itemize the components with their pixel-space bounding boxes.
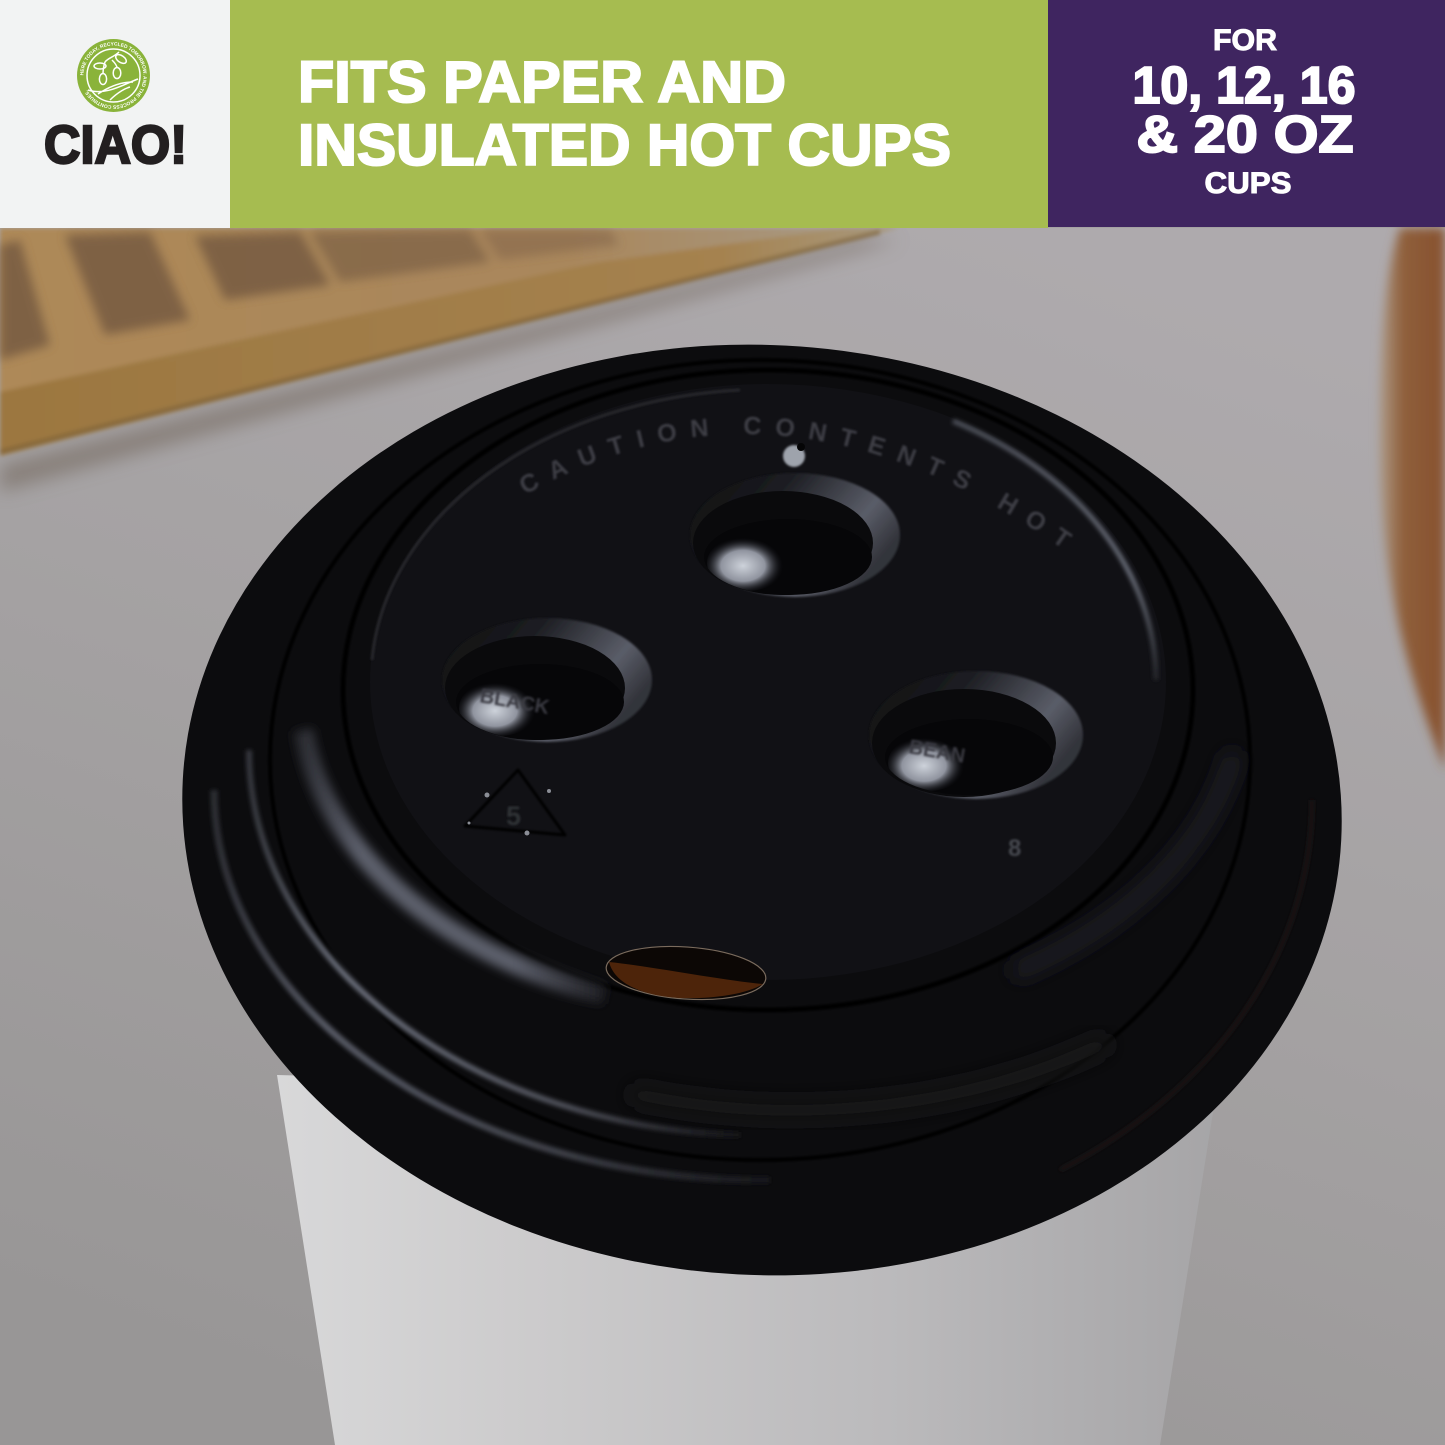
embossed mould number: 8 bbox=[1008, 835, 1021, 862]
sizes text: 10, 12, 16 bbox=[1132, 57, 1356, 115]
sizes text bbox=[1132, 24, 1356, 200]
white paper cup bbox=[277, 1075, 1215, 1445]
recycling triangle mark 5: 5 bbox=[506, 801, 521, 831]
recessed lid top bbox=[370, 384, 1166, 980]
title bbox=[298, 50, 951, 178]
wooden board with printed text, blurred bbox=[0, 228, 900, 492]
lid silhouette bbox=[158, 315, 1366, 1305]
header: logo panel bbox=[0, 0, 230, 228]
sizes text: FOR bbox=[1213, 24, 1277, 57]
wooden round tray at right edge bbox=[1380, 228, 1445, 770]
top vent pinhole bbox=[783, 443, 805, 467]
dimple: right bbox=[869, 671, 1083, 799]
dimple: top bbox=[690, 473, 900, 597]
lid rim highlights bbox=[214, 360, 1312, 1180]
title: INSULATED HOT CUPS bbox=[298, 113, 951, 178]
dimple: right: BEAN bbox=[907, 736, 967, 768]
logo wordmark: CIAO! bbox=[44, 115, 187, 175]
dimple: left bbox=[442, 618, 652, 742]
recycling triangle mark 5 bbox=[465, 770, 565, 836]
sizes text: CUPS bbox=[1204, 167, 1292, 200]
sip opening bbox=[604, 941, 768, 1005]
black plastic lid bbox=[182, 344, 1342, 1276]
embossed lid lettering: CAUTION CONTENTS HOT bbox=[520, 416, 1073, 546]
logo badge: HERE TODAY, RECYCLED TOMORROW. AND THE PROCESS CONTINUES. bbox=[80, 42, 147, 109]
top ring highlight bbox=[953, 421, 1156, 680]
sizes text: & 20 OZ bbox=[1136, 106, 1354, 164]
dimple: left: BLACK bbox=[478, 685, 551, 719]
title: FITS PAPER AND bbox=[298, 50, 786, 115]
header: purple cup sizes panel bbox=[1048, 0, 1445, 227]
header: green title panel bbox=[230, 0, 1048, 228]
